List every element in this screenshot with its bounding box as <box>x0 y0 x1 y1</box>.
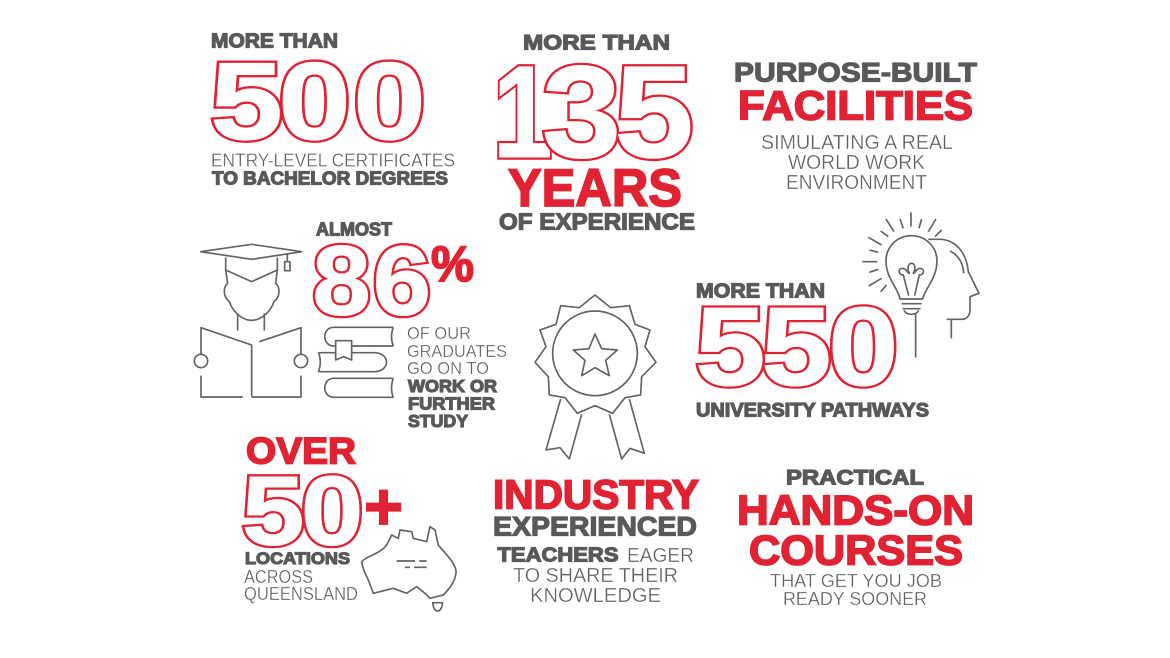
number: 500: 500 <box>210 40 426 163</box>
heading: almost: ALMOST <box>316 220 392 240</box>
text: to bachelor degrees: TO BACHELOR DEGREES <box>212 168 448 188</box>
percent sign: % <box>431 236 474 292</box>
heading: courses: COURSES <box>749 526 963 574</box>
text: work or further study: WORK OR <box>408 376 497 396</box>
icon: stack of books <box>318 327 393 397</box>
heading: years: YEARS <box>508 159 682 218</box>
text: of our graduates go on to <box>407 323 507 378</box>
number: 135: 35 <box>542 39 694 186</box>
text: simulating a real world work environment: SIMULATING A REAL <box>761 132 953 154</box>
heading: practical: PRACTICAL <box>786 466 924 490</box>
panel: practical hands-on courses <box>737 466 974 609</box>
text: teachers: TEACHERS <box>498 544 618 566</box>
panel: 86 percent graduates <box>194 220 507 431</box>
text: across queensland: QUEENSLAND <box>244 584 358 604</box>
icon: award rosette <box>535 295 656 459</box>
text: work or further study: FURTHER <box>408 394 495 414</box>
panel: 550 university pathways <box>695 212 979 422</box>
text: across queensland <box>244 567 358 604</box>
number: 86: 86 <box>312 226 431 336</box>
text: across queensland: ACROSS <box>244 567 313 587</box>
heading: facilities: FACILITIES <box>738 82 973 128</box>
text: eager to share their knowledge: KNOWLEDGE <box>530 585 661 607</box>
text: eager to share their knowledge <box>513 545 694 607</box>
number: 86: 86 <box>312 226 431 336</box>
panel: 500 certificates <box>210 30 455 188</box>
number: 550: 550 <box>695 285 898 409</box>
text: eager to share their knowledge: EAGER <box>627 545 694 567</box>
text: of our graduates go on to: GRADUATES <box>407 341 507 361</box>
panel: over 50 locations <box>242 430 456 611</box>
panel: industry experienced teachers <box>493 472 699 607</box>
text: simulating a real world work environment: WORLD WORK <box>788 152 926 174</box>
number: 550: 550 <box>695 285 898 409</box>
heading: more than: MORE THAN <box>523 32 670 54</box>
text: work or further study <box>408 376 497 431</box>
heading: purpose-built: PURPOSE-BUILT <box>734 58 978 88</box>
text: work or further study: STUDY <box>408 411 468 431</box>
text: simulating a real world work environment <box>761 132 953 194</box>
icon: map of Australia <box>362 527 456 611</box>
number: 135: 1 <box>493 40 552 185</box>
text: eager to share their knowledge: TO SHARE THEIR <box>513 565 678 587</box>
heading: experienced: EXPERIENCED <box>493 512 697 542</box>
heading: more than: MORE THAN <box>211 30 338 52</box>
text: university pathways: UNIVERSITY PATHWAYS <box>696 400 929 422</box>
number: 135: 35 <box>542 39 694 186</box>
heading: industry: INDUSTRY <box>493 472 699 518</box>
heading: more than: MORE THAN <box>696 280 825 302</box>
icon: graduate reading a book <box>194 244 308 397</box>
text: that get you job ready sooner <box>770 570 942 609</box>
text: that get you job ready sooner: READY SOONER <box>783 588 927 609</box>
panel: purpose-built facilities <box>734 58 978 194</box>
text: that get you job ready sooner: THAT GET YOU JOB <box>770 570 942 591</box>
text: locations: LOCATIONS <box>245 549 350 568</box>
text: of our graduates go on to: GO ON TO <box>407 358 489 378</box>
text: entry-level certificates: ENTRY-LEVEL CERTIFICATES <box>211 150 455 170</box>
number: 50: 50 <box>242 456 363 566</box>
icon: light bulb and head <box>862 212 979 358</box>
number: 50: 50 <box>242 456 363 566</box>
text: of experience: OF EXPERIENCE <box>499 208 695 234</box>
text: of our graduates go on to: OF OUR <box>407 323 471 343</box>
text: simulating a real world work environment: ENVIRONMENT <box>786 172 927 194</box>
plus sign: + <box>364 469 403 543</box>
panel: 135 years <box>493 32 695 234</box>
number: 500: 500 <box>210 40 426 163</box>
number: 135: 1 <box>493 40 552 185</box>
heading: hands-on: HANDS-ON <box>737 486 974 534</box>
heading: over: OVER <box>246 430 356 472</box>
